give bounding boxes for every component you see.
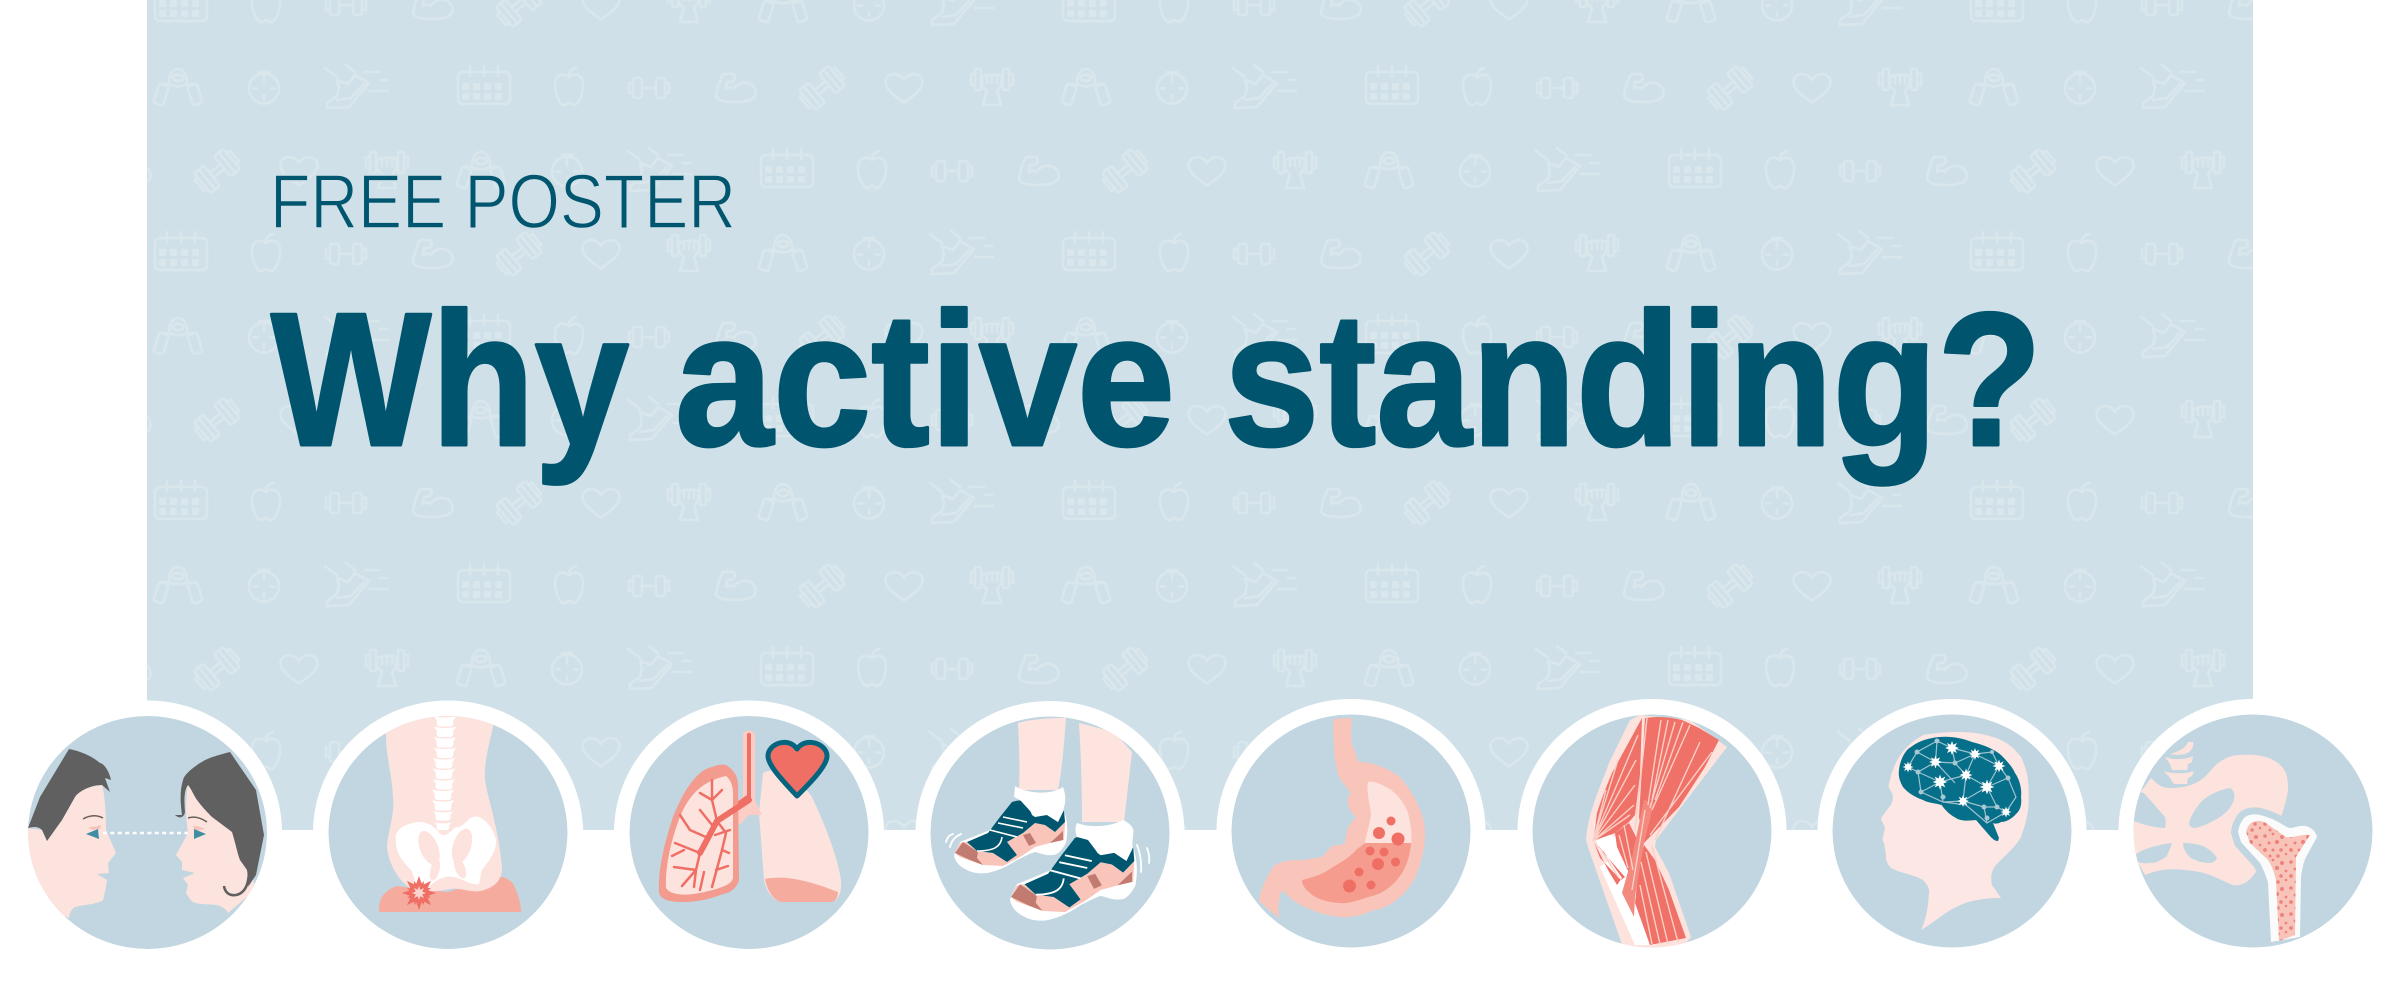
pelvis [2125,755,2288,885]
lower leg muscle [1635,845,1686,945]
heart [768,742,827,796]
left lung [659,765,739,902]
neural sparks [1902,741,2012,818]
icon: stomach and digestion [1232,714,1470,948]
left sock [1014,786,1065,822]
title: Why active standing?: standing? [1224,274,2042,486]
icon: eye level, two faces [20,716,267,949]
vertebrae [2164,742,2194,784]
cushion [379,877,521,912]
back silhouette [386,700,502,891]
background panel with fitness icon pattern [147,0,2253,830]
legs [1018,718,1132,822]
small knee muscles [1594,842,1625,885]
title: Why active standing?: active [675,274,1175,486]
eyebrows and eyes [83,816,207,839]
icon: hip bone and femur [2125,714,2372,948]
girl face [176,785,255,913]
girl hair [175,752,264,887]
outer tissue [1586,715,1727,950]
tendon white [1594,823,1655,945]
right shoe [1010,836,1137,921]
trachea [738,730,762,825]
head silhouette [1881,732,2029,930]
pelvis [396,817,496,887]
icon: leg muscles [1532,714,1772,950]
outer thigh muscle [1593,718,1642,841]
eyebrow label: FREE POSTER: FREE POSTER [270,159,736,245]
title: Why active standing?: Why [271,274,629,486]
icon: lungs and heart [630,716,868,949]
icon: head and active brain [1832,714,2072,948]
gastric liquid [1302,843,1411,903]
neural network nodes [1914,738,2010,820]
white rings behind circles [13,699,2388,965]
femur [2238,814,2317,942]
boy hair [28,749,111,841]
pain burst [402,876,436,910]
girl hair curl [224,870,249,895]
spine [432,716,456,830]
bronchial tree [672,780,730,890]
left shoe [954,800,1067,873]
boy face [20,785,116,918]
neural network lines [1908,741,2016,823]
right lung [759,771,841,902]
mid muscle [1615,823,1636,871]
dotted gaze line [103,832,188,834]
main thigh muscle [1639,717,1719,843]
bone marrow [2246,821,2310,941]
muscle fibres [1593,718,1712,944]
title: Why active standing? [271,274,2042,486]
icon: lower back and sitting pain [328,700,568,949]
icon: legs and moving shoes [930,716,1170,950]
central long muscle [1622,800,1654,917]
brain [1899,737,2021,841]
stomach wall [1259,718,1425,918]
upper chamber [1365,782,1411,843]
motion lines [946,834,1149,872]
pelvis holes [2130,788,2234,863]
right sock [1076,820,1134,853]
acid bubbles [1343,816,1404,892]
